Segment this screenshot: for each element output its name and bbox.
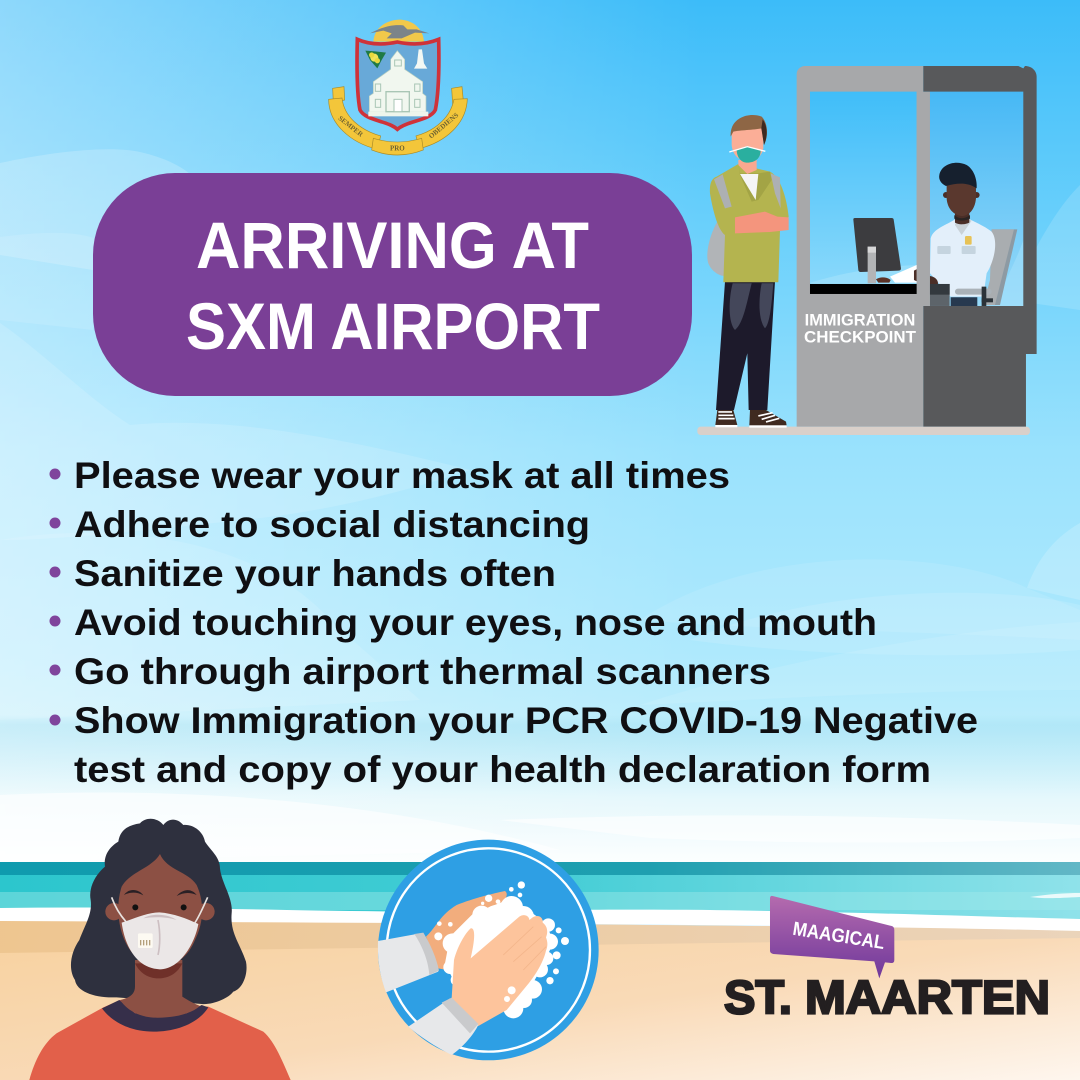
crest: sun behind bird <box>373 20 424 42</box>
traveller: green hoodie <box>710 164 789 282</box>
logo: Maagical St. Maarten <box>724 896 1050 1024</box>
woman: collar <box>102 1000 208 1032</box>
badge: upper sleeve <box>378 933 438 992</box>
bullet 1: Please wear your mask at all times <box>74 455 730 496</box>
crest: shield <box>357 39 439 129</box>
officer: shirt <box>930 218 995 297</box>
booth: counter <box>810 284 917 294</box>
bullet 6: Show Immigration your PCR COVID-19 Negative <box>74 700 978 741</box>
officer: neck and head <box>955 210 969 224</box>
illustration: woman wearing mask <box>29 819 291 1080</box>
booth label: CHECKPOINT <box>804 328 916 346</box>
bullet 4: Avoid touching your eyes, nose and mouth <box>74 602 877 643</box>
crest: courthouse <box>368 51 428 116</box>
crest: ribbon scroll: PRO <box>390 145 405 153</box>
woman: face <box>105 854 215 967</box>
traveller: crossed arms <box>735 212 789 233</box>
traveller with mask and backpack <box>707 115 789 428</box>
badge: foam <box>434 881 569 1018</box>
booth: window glass <box>808 90 1025 308</box>
title text line 2: SXM AIRPORT <box>186 289 600 363</box>
crest: ribbon scroll: OBEDIENS <box>427 111 460 140</box>
woman: shirt <box>29 1000 291 1080</box>
background: sea <box>0 862 1080 924</box>
booth: officer hand and device <box>914 269 950 306</box>
crest: ribbon scroll <box>329 87 467 155</box>
bullet 5: Go through airport thermal scanners <box>74 651 771 692</box>
logo: MAAGICAL text: MAAGICAL <box>791 919 886 954</box>
crest: grapes and leaves <box>365 51 386 68</box>
logo: speech bubble <box>770 896 894 978</box>
officer: hair <box>939 163 977 188</box>
background: sand <box>0 907 1080 1080</box>
booth label: IMMIGRATION <box>805 312 915 330</box>
bullet list <box>50 455 978 790</box>
illustration: immigration booth and traveller <box>697 66 1037 435</box>
booth: paper on desk <box>890 265 917 283</box>
traveller: neck <box>738 160 757 174</box>
logo: ST. MAARTEN wordmark: ST. <box>724 971 792 1024</box>
officer seated behind glass <box>930 163 1017 306</box>
bullet 6: test and copy of your health declaration form <box>74 749 931 790</box>
crest: ribbon scroll: SEMPER <box>337 114 365 139</box>
officer: trousers and armrest <box>951 297 977 306</box>
bullet 3: Sanitize your hands often <box>74 553 556 594</box>
booth: computer monitor <box>853 218 901 283</box>
crest: monument <box>414 49 427 69</box>
traveller: white t-shirt <box>740 174 758 200</box>
officer: chair <box>983 229 1017 305</box>
booth: floor <box>697 427 1030 435</box>
badge: back hand <box>426 891 507 970</box>
badge: finger creases <box>503 927 546 970</box>
traveller: trousers <box>716 282 775 410</box>
logo: ST. MAARTEN wordmark: MAARTEN <box>805 971 1050 1024</box>
traveller: backpack straps <box>714 173 781 208</box>
badge: white ring <box>387 848 590 1052</box>
booth: centre pillar <box>917 92 930 306</box>
bullet 2: Adhere to social distancing <box>74 504 590 545</box>
traveller: hair <box>731 115 767 145</box>
woman: hair <box>71 819 247 1004</box>
badge: soap dots on hand <box>504 986 516 1002</box>
badge: blue disc <box>378 840 599 1060</box>
icon: hand washing badge <box>378 840 599 1060</box>
traveller: shoes <box>715 410 787 428</box>
traveller: face <box>732 128 763 162</box>
woman: neck <box>120 960 200 1018</box>
badge: lower sleeve <box>408 998 478 1055</box>
booth label <box>804 312 916 346</box>
crest: pelican <box>370 25 429 38</box>
title text line 1: ARRIVING AT <box>196 208 589 282</box>
badge: front hand <box>452 915 547 1026</box>
traveller: mask <box>729 146 765 163</box>
coat of arms crest <box>329 20 467 155</box>
booth: right dark section <box>923 66 1037 427</box>
title panel <box>93 173 692 396</box>
bullet 6 <box>50 700 978 790</box>
booth: structure frame <box>797 66 923 427</box>
traveller: backpack <box>707 220 730 276</box>
woman: KN95 mask <box>112 897 208 969</box>
